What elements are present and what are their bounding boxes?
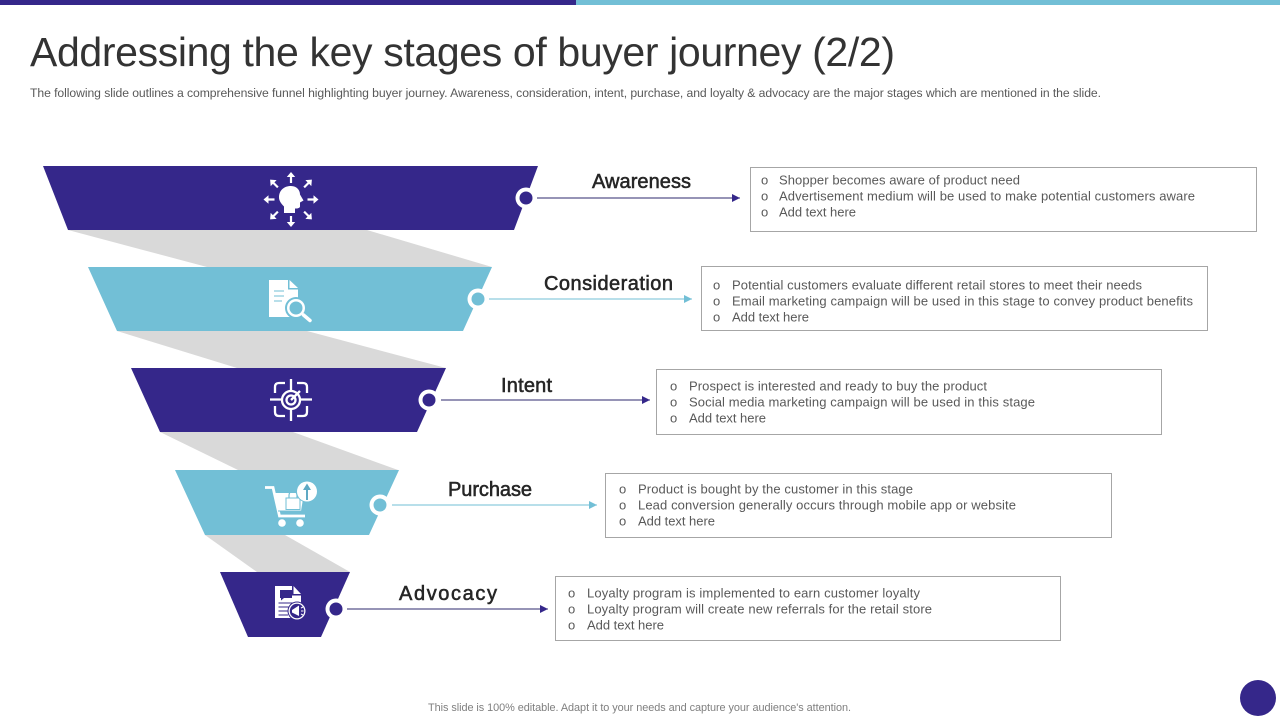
text box: intent: Social media marketing campaign will be used in this stage — [689, 394, 1035, 410]
icon: target — [270, 379, 312, 421]
page badge — [1240, 680, 1276, 716]
text box: consideration: o — [713, 278, 720, 292]
text box: consideration: Add text here — [732, 310, 809, 324]
text box: awareness: Shopper becomes aware of product need — [779, 172, 1020, 188]
text box: consideration: o — [713, 294, 720, 308]
panel: advocacy funnel stage — [220, 572, 350, 637]
text box: advocacy: Loyalty program will create new referrals for the retail store — [587, 602, 932, 616]
panel: intent funnel stage — [131, 368, 446, 432]
text box: intent: o — [670, 410, 677, 426]
icon: document with megaphone — [275, 586, 306, 620]
text box: consideration: Email marketing campaign will be used in this stage to convey product benefits — [732, 294, 1194, 308]
text box: purchase: Add text here — [638, 514, 715, 528]
text box: advocacy: o — [568, 586, 575, 600]
text box: purchase: Lead conversion generally occurs through mobile app or website — [638, 498, 1016, 512]
text box: advocacy — [556, 576, 1060, 640]
arrow: intent — [441, 399, 650, 401]
arrow: purchase — [392, 504, 597, 506]
text box: awareness: o — [761, 204, 768, 220]
text box: advocacy: o — [568, 618, 575, 632]
title: Addressing the key stages of buyer journey (2/2) — [30, 29, 895, 75]
icon: shopping cart — [265, 480, 318, 527]
connector dot — [370, 494, 390, 516]
label: purchase: Purchase — [448, 479, 532, 501]
funnel connectors — [68, 230, 492, 572]
label: advocacy: Advocacy — [399, 583, 497, 605]
text box: advocacy: Loyalty program is implemented to earn customer loyalty — [587, 586, 920, 600]
connector dot — [326, 598, 346, 620]
text box: consideration: Potential customers evaluate different retail stores to meet their needs — [732, 278, 1142, 292]
text box: awareness: Advertisement medium will be used to make potential customers aware — [779, 188, 1195, 204]
text box: intent: o — [670, 378, 677, 394]
text box: intent: o — [670, 394, 677, 410]
panel: consideration funnel stage — [88, 267, 492, 331]
text box: purchase: Product is bought by the customer in this stage — [638, 482, 913, 496]
text box: intent — [656, 370, 1162, 434]
text box: awareness: Add text here — [779, 204, 856, 220]
text box: consideration: o — [713, 310, 720, 324]
text box: advocacy: o — [568, 602, 575, 616]
arrow: awareness — [537, 197, 740, 199]
text box: purchase: o — [619, 514, 626, 528]
icon: document with magnifier — [269, 280, 310, 320]
top accent bar — [0, 0, 1280, 5]
arrow: advocacy — [347, 608, 548, 610]
text box: purchase: o — [619, 482, 626, 496]
arrow: consideration — [489, 298, 692, 300]
footer note: This slide is 100% editable. Adapt it to your needs and capture your audience's attention. — [428, 702, 851, 714]
text box: purchase — [606, 474, 1112, 538]
connector dot — [418, 390, 440, 410]
text box: advocacy: Add text here — [587, 618, 664, 632]
subtitle: The following slide outlines a comprehensive funnel highlighting buyer journey. Awareness, consideration, intent, purchase, and loyalty & advocacy are the major stages which are mentioned in the slide. — [30, 86, 1101, 100]
text box: consideration — [702, 266, 1208, 330]
text box: purchase: o — [619, 498, 626, 512]
connector dot — [468, 288, 488, 310]
icon: head with arrows — [264, 172, 318, 227]
panel: awareness funnel stage — [43, 166, 538, 230]
text box: awareness: o — [761, 172, 768, 188]
label: awareness: Awareness — [592, 171, 691, 193]
text box: awareness: o — [761, 188, 768, 204]
panel: purchase funnel stage — [175, 470, 399, 535]
label: consideration: Consideration — [544, 273, 673, 295]
text box: awareness — [750, 168, 1256, 232]
text box: intent: Add text here — [689, 410, 766, 426]
connector dot — [516, 188, 536, 208]
text box: intent: Prospect is interested and ready to buy the product — [689, 378, 987, 394]
label: intent: Intent — [501, 375, 552, 397]
